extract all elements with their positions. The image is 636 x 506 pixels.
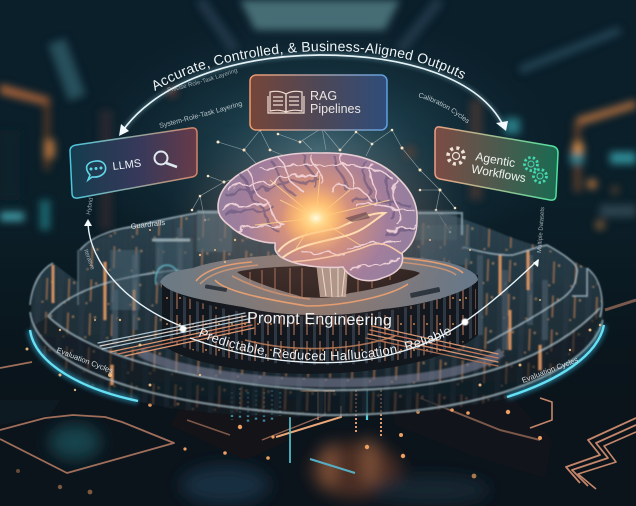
temporal lobe outline bbox=[278, 213, 385, 258]
network constellation around the brain bbox=[192, 128, 455, 232]
arrowhead: left bbox=[119, 124, 129, 136]
teal dot cluster bbox=[232, 388, 280, 424]
small annotation labels: Evaluation Cycles bbox=[55, 345, 114, 375]
arrowhead: right bbox=[496, 121, 508, 131]
circuit board floor bbox=[0, 300, 636, 506]
icon: small green gears bbox=[524, 158, 546, 182]
icon: gear bbox=[448, 148, 464, 164]
subtitle on lower arc: Predictable, Reduced Hallucation, Reliable bbox=[198, 328, 451, 360]
scattered light particles bbox=[26, 229, 601, 391]
front wall shading bbox=[30, 310, 603, 417]
small annotation labels: Iterative bbox=[82, 249, 95, 271]
small annotation labels: Precise Role-Task Layering bbox=[168, 68, 238, 92]
small annotation labels: Multiple Datasets bbox=[537, 207, 546, 253]
central chip platform bbox=[160, 255, 478, 374]
small annotation labels bbox=[55, 68, 580, 385]
title text on arc: Accurate, Controlled, & Business-Aligned Outputs bbox=[153, 40, 465, 91]
outer glass ring platform bbox=[30, 212, 603, 417]
dark component blocks bbox=[0, 395, 552, 478]
brain bbox=[195, 140, 445, 310]
label: LLMS: LLMS bbox=[112, 158, 142, 173]
card: RAG Pipelines bbox=[250, 75, 387, 130]
floor lights bbox=[16, 402, 542, 494]
center label: Prompt Engineering: Prompt Engineering bbox=[247, 310, 392, 330]
label: RAG Pipelines: Pipelines bbox=[310, 102, 361, 116]
small annotation labels: Calibration Cycles bbox=[418, 93, 469, 124]
small annotation labels: System-Role-Task Layering bbox=[160, 102, 242, 128]
label: RAG Pipelines: RAG bbox=[310, 89, 337, 103]
network nodes bbox=[191, 127, 456, 233]
brain folds bbox=[222, 155, 417, 270]
cyan glowing ring edges bbox=[30, 325, 604, 401]
ribbon cables bbox=[98, 313, 498, 366]
icon: open book bbox=[268, 91, 304, 113]
card: LLMs bbox=[70, 128, 197, 198]
brain stem bbox=[316, 262, 348, 297]
small annotation labels: Evaluation Cycles bbox=[520, 355, 580, 385]
glass tower blocks behind the chip bbox=[110, 210, 470, 310]
floor reflections bbox=[49, 424, 490, 505]
label: Agentic Workflows: Agentic bbox=[474, 149, 516, 170]
lower left arc arrow bbox=[84, 219, 186, 332]
icon: chat bubble bbox=[87, 161, 106, 180]
small annotation labels: Hybrid bbox=[86, 197, 95, 215]
top arc arrow bbox=[119, 55, 508, 136]
label: Agentic Workflows: Workflows bbox=[470, 162, 527, 185]
card: Agentic Workflows bbox=[435, 127, 558, 200]
small annotation labels: Guardrails bbox=[130, 218, 166, 231]
lower arc arrow bbox=[190, 259, 539, 363]
icon: magnifier bbox=[154, 152, 177, 167]
